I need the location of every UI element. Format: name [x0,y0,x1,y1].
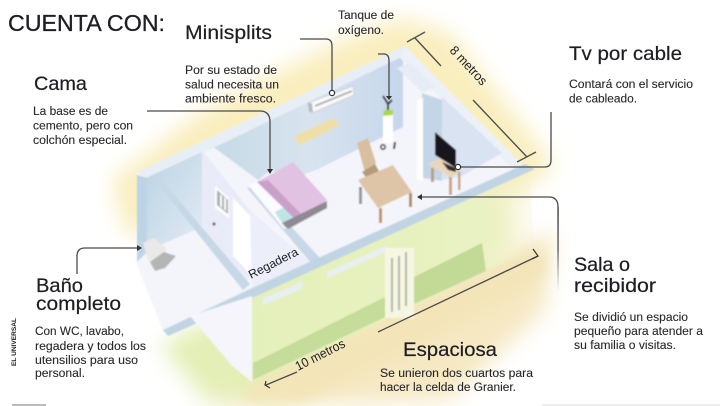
callout: tanque de oxigeno [338,8,394,37]
leader: sala [417,194,559,292]
toilet [143,238,166,270]
floor partition lines [153,178,250,290]
callout: sala o recibidor: recibidor [574,275,657,297]
callout: minisplits [185,22,279,106]
callout: sala o recibidor: pequeño para atender a [574,324,703,338]
dimension: 10 metros [265,249,538,388]
leader: minisplits [300,39,335,96]
callout: minisplits: Minisplits [185,22,272,44]
background glow [112,18,555,406]
callout: cama: cemento, pero con [33,118,133,132]
bed [248,181,302,229]
callout: bano completo: regadera y todos los [35,339,146,353]
windows [263,282,302,305]
bathroom wall [137,152,202,262]
right interior wall [442,97,502,180]
callout: bano completo: completo [36,293,121,315]
callout: cama: Cama [34,73,87,95]
callout: espaciosa [380,339,533,394]
front wall band [163,164,535,336]
callout: tv por cable [569,43,693,106]
leader: tanque [378,54,392,100]
callout: bano completo: utensilios para uso [35,353,138,367]
label: regadera: Regadera [246,245,301,282]
callout: cama: La base es de [33,104,108,118]
green exterior wall [252,171,534,382]
callout: cama [33,73,133,147]
back wall, main room [212,54,403,180]
leader: bano [77,245,142,274]
leader: cama [147,111,273,174]
callout: sala o recibidor: Se dividió un espacio [574,310,688,324]
ground strip [240,245,545,402]
credit: el universal: EL UNIVERSAL [11,318,18,366]
callout: espaciosa: hacer la celda de Granier. [380,380,516,394]
callout: bano completo: personal. [35,366,85,380]
callout: tv por cable: Tv por cable [569,43,682,65]
dimension: 8 metros: 8 metros [447,43,491,88]
callout: bano completo [35,275,146,380]
shelf [293,118,340,145]
regadera floor [250,210,310,288]
callout: minisplits: salud necesita un [185,78,279,92]
callout: minisplits: Por su estado de [185,63,277,77]
callout: espaciosa: Se unieron dos cuartos para [380,366,533,380]
left exterior white wall [190,296,252,382]
callout: sala o recibidor: su familia o visitas. [574,338,676,352]
wall top rim [137,46,412,178]
callout: espaciosa: Espaciosa [403,339,497,361]
right wall top rim [400,46,524,170]
tv stand [428,158,461,177]
dimension: 10 metros: 10 metros [293,336,348,374]
partition column [202,150,252,285]
callout: sala o recibidor: Sala o [574,254,630,276]
floor [137,46,522,335]
chair [357,138,376,173]
callout: tv por cable: Contará con el servicio [569,77,693,91]
callout: tanque de oxigeno: Tanque de [338,8,394,22]
callout: sala o recibidor [574,254,703,352]
dimension: 8 metros [407,32,536,162]
table [358,165,412,208]
callout: bano completo: Con WC, lavabo, [35,324,124,338]
bathroom vent and fixtures [215,186,229,218]
callout: bano completo: Baño [36,275,83,297]
illustration: isometric cell floor plan [112,18,555,406]
tv [435,132,456,168]
leader: tv [455,112,551,170]
door [385,248,414,318]
minisplit unit [308,86,354,113]
title: CUENTA CON: [8,10,165,36]
callout: tv por cable: de cableado. [569,92,637,106]
oxygen tank [383,115,393,143]
illustration body [137,46,535,382]
callout: cama: colchón especial. [33,133,127,147]
callout: minisplits: ambiente fresco. [185,92,276,106]
bottom edge marks [12,404,720,406]
callout: tanque de oxigeno: oxígeno. [338,23,384,37]
